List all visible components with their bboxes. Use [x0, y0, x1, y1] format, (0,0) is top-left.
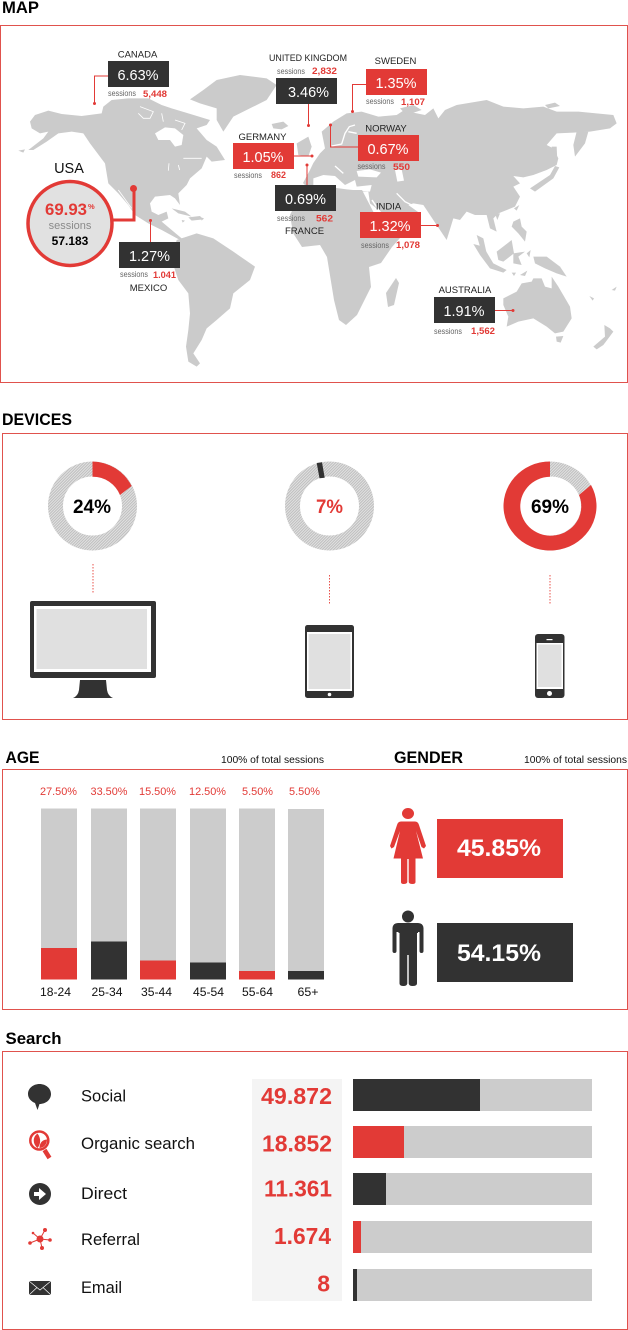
callout: USA: %: [88, 202, 95, 211]
callout: United Kingdom: 2,832: [312, 66, 337, 77]
callout: Sweden: 1.35%: [376, 75, 416, 92]
bar chart: age: 18-24: [40, 985, 71, 999]
callout: India: sessions: [361, 241, 389, 250]
dotted connector: desktop: [92, 564, 94, 594]
title: gender: GENDER: [394, 748, 463, 767]
callout: Canada: CANADA: [118, 50, 158, 60]
callout: Norway: 0.67%: [368, 141, 408, 158]
callout: Australia: AUSTRALIA: [439, 285, 492, 296]
bar chart: age: 12.50%: [189, 786, 226, 798]
callout: Norway: [329, 124, 419, 173]
callout: France: sessions: [277, 214, 305, 223]
callout: India: 1.32%: [370, 218, 410, 235]
callout: Sweden: SWEDEN: [375, 56, 416, 67]
callout: USA: 57.183: [52, 234, 89, 248]
callout: Mexico: sessions: [120, 270, 148, 279]
panel: devices: [2, 434, 628, 720]
callout: Australia: sessions: [434, 327, 462, 336]
icon: tablet: [305, 625, 354, 698]
row: email: [29, 1269, 592, 1301]
callout: Mexico: [119, 219, 180, 294]
callout: Norway: 550: [393, 162, 410, 173]
callout: Germany: 862: [271, 170, 286, 181]
icon: phone: [535, 634, 564, 698]
row: referral: [28, 1221, 592, 1253]
callout: Germany: 1.05%: [242, 149, 284, 166]
callout: Australia: 1.91%: [444, 303, 484, 320]
callout: Canada: [93, 50, 169, 105]
row: direct: Direct: [81, 1184, 127, 1203]
callout: Mexico: MEXICO: [130, 283, 167, 294]
bar chart: age: 27.50%: [40, 786, 77, 798]
callout: Norway: sessions: [358, 162, 386, 171]
donut: phone 69%: [504, 462, 597, 551]
bar chart: age: 15.50%: [139, 786, 176, 798]
row: direct: [29, 1173, 592, 1205]
row: social: 49.872: [261, 1083, 332, 1109]
bar chart: age: 65+: [298, 985, 318, 999]
title: devices: DEVICES: [2, 410, 72, 429]
callout: United Kingdom: [269, 53, 347, 127]
bar chart: age: 55-64: [242, 985, 273, 999]
callout: India: 1,078: [396, 240, 420, 251]
stat: male share: [437, 923, 573, 982]
callout: Norway: NORWAY: [365, 124, 407, 134]
panel: age and gender: [2, 770, 628, 1010]
callout: Germany: GERMANY: [238, 132, 287, 143]
callout: India: [360, 202, 439, 251]
callout: USA: sessions: [49, 220, 92, 232]
callout: France: 562: [316, 214, 333, 224]
row: referral: 1.674: [274, 1223, 331, 1249]
callout: Canada: 6.63%: [118, 67, 158, 84]
callout: United Kingdom: UNITED KINGDOM: [269, 53, 347, 64]
donut: desktop 24%: 24%: [73, 497, 111, 518]
row: organic search: [30, 1126, 592, 1158]
stat: female share: [437, 819, 563, 878]
icon: male figure: [392, 910, 424, 986]
stat: female share: 45.85%: [457, 835, 541, 862]
callout: Australia: [434, 285, 514, 337]
numbers column background: [252, 1079, 342, 1301]
donut: tablet 7%: 7%: [316, 497, 343, 518]
row: direct: 11.361: [264, 1176, 332, 1202]
dotted connector: phone: [549, 575, 551, 605]
callout: France: FRANCE: [285, 226, 324, 237]
note: age total: 100% of total sessions: [221, 755, 324, 766]
callout: USA: 69.93: [45, 200, 87, 219]
note: gender total: 100% of total sessions: [524, 755, 627, 766]
donut: phone 69%: 69%: [531, 497, 569, 518]
icon: female figure: [390, 808, 426, 884]
callout: USA: USA: [54, 161, 84, 177]
row: organic search: Organic search: [81, 1134, 195, 1153]
callout: Mexico: 1.27%: [129, 248, 170, 265]
title: age: AGE: [6, 748, 40, 767]
callout: Sweden: [351, 56, 427, 113]
callout: Germany: sessions: [234, 171, 262, 180]
row: social: [28, 1079, 592, 1111]
bar chart: age: [40, 786, 324, 999]
row: referral: Referral: [81, 1230, 140, 1249]
bar chart: age: 5.50%: [289, 786, 320, 798]
callout: France: [275, 164, 336, 237]
bar chart: age: 33.50%: [90, 786, 128, 798]
callout: United Kingdom: sessions: [277, 67, 305, 76]
bar chart: age: 25-34: [92, 985, 123, 999]
callout: Canada: 5,448: [143, 89, 167, 100]
bar chart: age: 45-54: [193, 985, 224, 999]
panel: map: [0, 26, 628, 382]
stat: male share: 54.15%: [457, 940, 541, 967]
callout: India: INDIA: [376, 202, 402, 212]
panel: search: [2, 1052, 628, 1330]
row: email: Email: [81, 1278, 122, 1297]
bar chart: age: 35-44: [141, 985, 172, 999]
callout: Germany: [233, 132, 314, 181]
callout: France: 0.69%: [285, 191, 326, 208]
donut: desktop 24%: [56, 462, 132, 543]
callout: Sweden: 1,107: [401, 97, 425, 108]
row: organic search: 18.852: [262, 1130, 332, 1156]
icon: desktop monitor: [30, 601, 156, 698]
world map: [18, 75, 617, 367]
row: social: Social: [81, 1086, 126, 1106]
bar chart: age: 5.50%: [242, 786, 273, 798]
donut: tablet 7%: [292, 462, 366, 543]
callout: Australia: 1,562: [471, 326, 495, 337]
row: email: 8: [317, 1270, 330, 1296]
title: search: Search: [6, 1029, 62, 1048]
callout: USA: [28, 161, 137, 266]
callout: Mexico: 1.041: [153, 270, 177, 281]
callout: Canada: sessions: [108, 89, 136, 98]
callout: Sweden: sessions: [366, 97, 394, 106]
callout: United Kingdom: 3.46%: [288, 84, 329, 101]
dotted connector: tablet: [328, 575, 330, 605]
